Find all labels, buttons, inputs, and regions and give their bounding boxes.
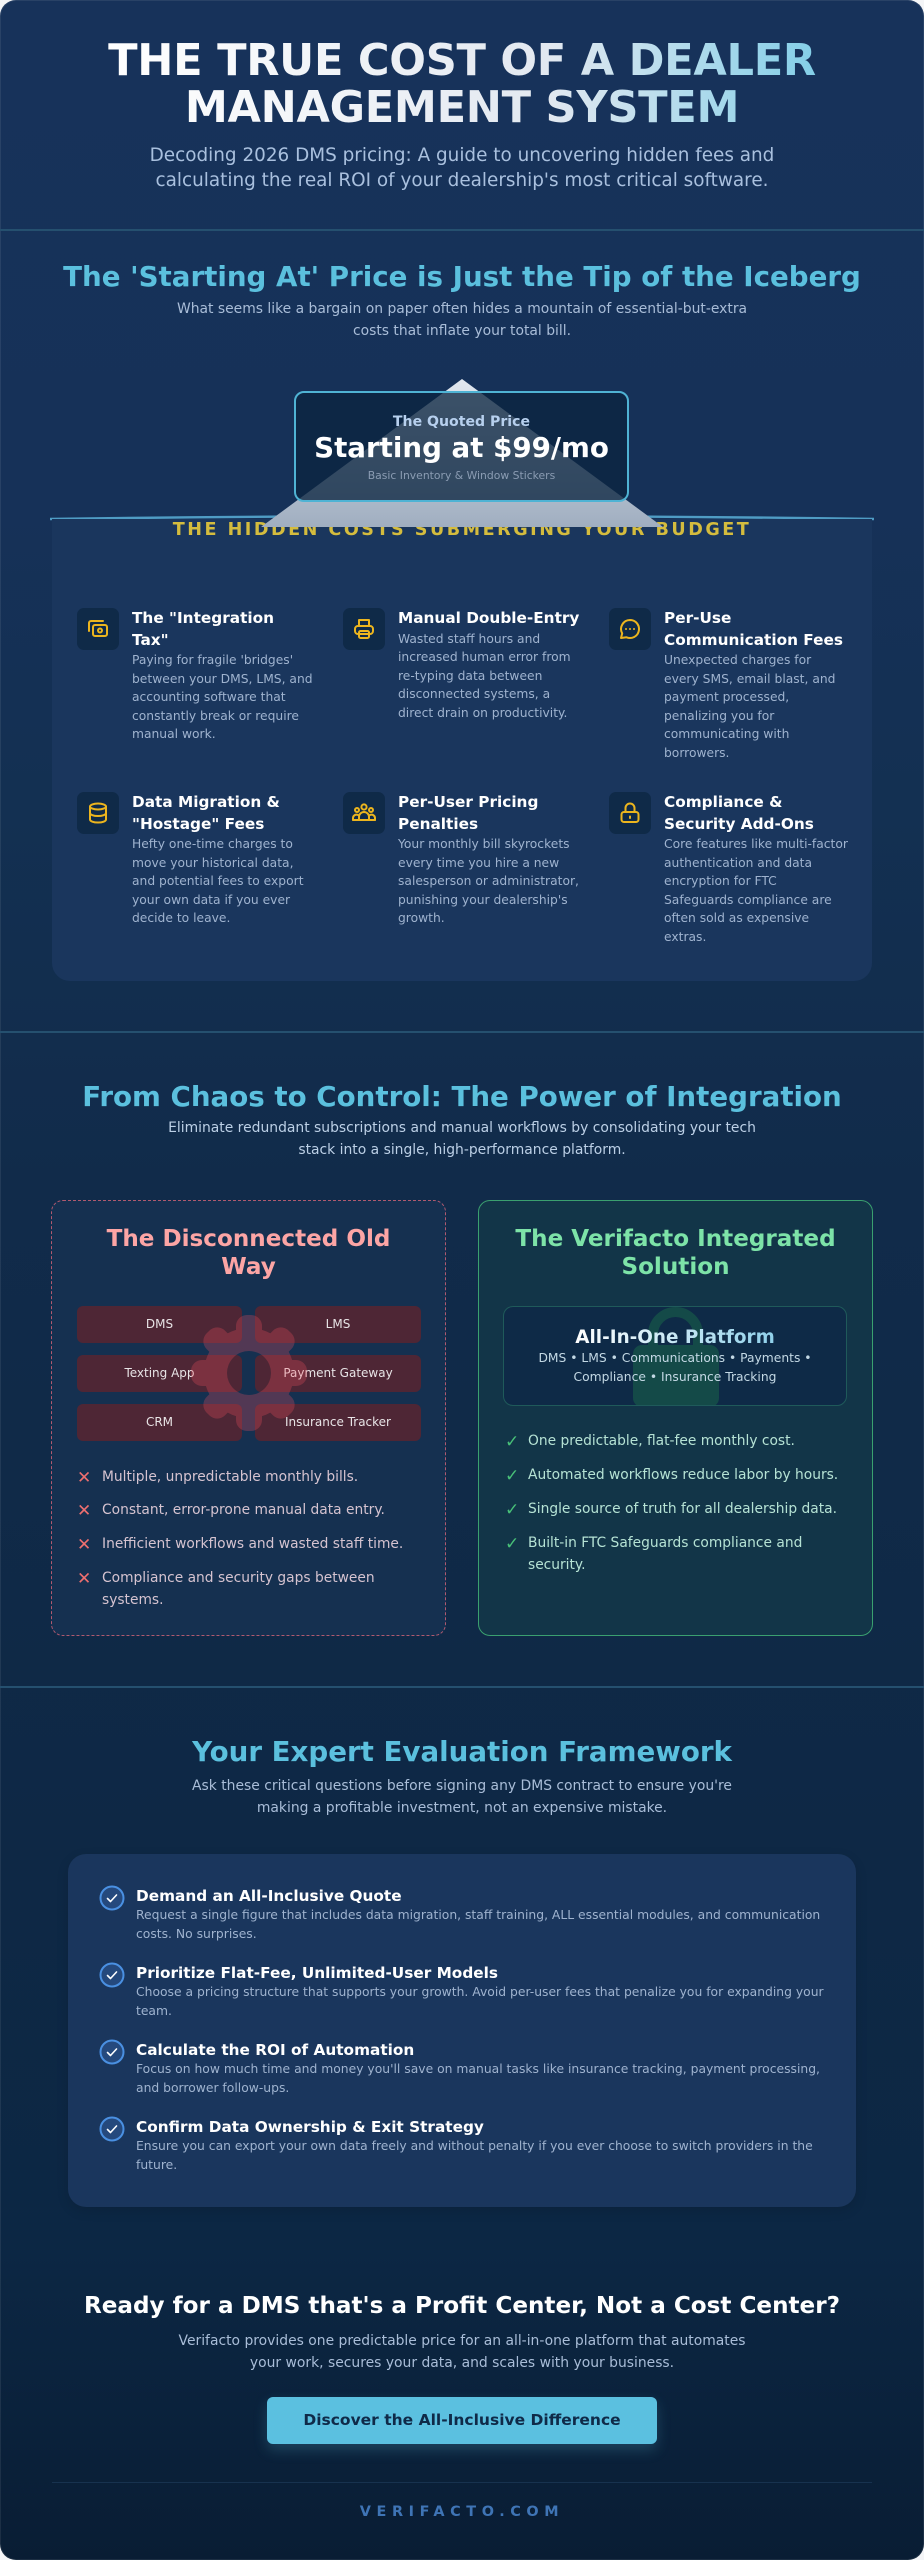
icon: database [77,792,119,834]
cost text: Penalties [398,815,478,833]
panel: hidden costs [52,519,872,981]
cost text: growth. [398,911,445,925]
cost item: integration tax [77,608,313,741]
old way list: ✕ [77,1569,91,1589]
iceberg section intro: What seems like a bargain on paper often hides a mountain of essential-but-extra [177,301,747,317]
solution heading [515,1226,836,1280]
item text: team. [136,2004,172,2018]
item text: Request a single figure that includes data migration, staff training, ALL essential modules, and communication [136,1908,820,1922]
platform modules: Compliance • Insurance Tracking [574,1370,776,1384]
cost text: Safeguards compliance are [664,893,832,907]
heading: iceberg section: The 'Starting At' Price is Just the Tip of the Iceberg [63,260,861,293]
old way list: ✕ [77,1535,91,1555]
heading: integration section: From Chaos to Control: The Power of Integration [82,1080,842,1113]
cost text: Per-Use [664,609,731,627]
cost text: Tax" [132,631,169,649]
cost text: Security Add-Ons [664,815,814,833]
subtitle: calculating the real ROI of your dealership's most critical software. [156,170,768,191]
call to action text [178,2333,745,2371]
old way list: Inefficient workflows and wasted staff time. [102,1536,403,1552]
cost text: encryption for FTC [664,874,777,888]
cost text: re-typing data between [398,669,542,683]
solution list: Single source of truth for all dealership data. [528,1501,837,1517]
solution list: ✓ [505,1432,519,1452]
icon: check circle [100,1886,124,1910]
item text [136,2041,820,2094]
cost text [132,609,313,741]
solution list: ✓ [505,1534,519,1554]
iceberg tip [261,379,663,527]
icon: check circle [100,2040,124,2064]
cost text: Your monthly bill skyrockets [398,837,570,851]
call to action text: Verifacto provides one predictable price for an all-in-one platform that automates [179,2333,745,2349]
old way heading: Way [221,1254,276,1280]
cost item: per-user pricing [343,792,579,925]
old way list: Compliance and security gaps between [102,1570,375,1586]
item text: Confirm Data Ownership & Exit Strategy [136,2118,484,2136]
checklist item 3 [100,2040,820,2094]
hidden costs heading: THE HIDDEN COSTS SUBMERGING YOUR BUDGET [173,520,751,540]
cost item: compliance add-ons [609,792,848,944]
call to action button [267,2397,657,2444]
old way heading: The Disconnected Old [107,1226,390,1252]
cost text: The "Integration [132,609,274,627]
solution list [505,1432,838,1573]
footer: website: VERIFACTO.COM [360,2504,564,2520]
solution list: ✓ [505,1500,519,1520]
old way list: ✕ [77,1501,91,1521]
cost text: disconnected systems, a [398,687,550,701]
icon: banknotes [77,608,119,650]
solution list: Built-in FTC Safeguards compliance and [528,1535,802,1551]
item text: Demand an All-Inclusive Quote [136,1887,402,1905]
framework intro: Ask these critical questions before signing any DMS contract to ensure you're [192,1778,732,1794]
platform modules [538,1351,812,1384]
cost text: borrowers. [664,746,729,760]
platform modules: DMS • LMS • Communications • Payments • [538,1351,812,1365]
old way list: Multiple, unpredictable monthly bills. [102,1469,358,1485]
cost text [132,793,304,925]
cost item: manual double-entry [343,608,579,720]
panel: integrated solution [478,1200,873,1636]
cost text: increased human error from [398,650,571,664]
title: THE TRUE COST OF A DEALER [108,36,816,86]
chips: disconnected tools: Insurance Tracker [285,1415,391,1429]
icon: lock [609,792,651,834]
item text [136,2118,813,2172]
chips: disconnected tools [77,1306,421,1441]
framework intro [192,1778,732,1816]
framework intro: making a profitable investment, not an expensive mistake. [257,1800,667,1816]
cost text [398,793,579,925]
icon: gear [191,1315,307,1431]
icon: check circle [100,2116,124,2142]
call to action button: Discover the All-Inclusive Difference [303,2411,621,2429]
cost text: Compliance & [664,793,782,811]
item text: and borrower follow-ups. [136,2080,289,2094]
cost text: Unexpected charges for [664,653,811,667]
panel: disconnected old way [51,1200,446,1636]
item text [136,1964,824,2018]
icon: lock watermark [633,1307,719,1405]
item text [136,1887,820,1940]
checklist item 2 [100,1962,824,2018]
item text: Focus on how much time and money you'll save on manual tasks like insurance tracking, payment processing, [136,2062,820,2076]
solution list: security. [528,1557,586,1573]
cost text: extras. [664,930,706,944]
solution list: ✓ [505,1466,519,1486]
cost text: between your DMS, LMS, and [132,672,313,686]
cost text: Hefty one-time charges to [132,837,293,851]
chips: disconnected tools: LMS [326,1317,350,1331]
item text: Choose a pricing structure that supports your growth. Avoid per-user fees that penalize you for expanding your [136,1985,824,1999]
cost text: Communication Fees [664,631,843,649]
item text: Ensure you can export your own data freely and without penalty if you ever choose to switch providers in the [136,2139,813,2153]
cost text: manual work. [132,727,216,741]
cost item: data migration [77,792,304,925]
solution list: One predictable, flat-fee monthly cost. [528,1433,795,1449]
title: MANAGEMENT SYSTEM [185,82,739,132]
chips: disconnected tools: Texting App [124,1366,195,1380]
item text: future. [136,2158,177,2172]
item text: costs. No surprises. [136,1926,257,1940]
old way list: ✕ [77,1468,91,1488]
title [90,38,834,131]
cost text: decide to leave. [132,911,230,925]
heading: evaluation framework: Your Expert Evaluation Framework [192,1735,732,1768]
chips: disconnected tools: DMS [146,1317,173,1331]
chips: disconnected tools: Payment Gateway [283,1366,393,1380]
icon: chat bubble [609,608,651,650]
all-in-one platform box [503,1306,847,1406]
checklist item 4 [100,2116,813,2172]
quoted price box [294,391,629,502]
cost text: accounting software that [132,690,286,704]
cost text: and potential fees to export [132,874,304,888]
cost text: every time you hire a new [398,856,559,870]
old way list: systems. [102,1592,163,1608]
solution list: Automated workflows reduce labor by hours. [528,1467,838,1483]
checklist item 1 [100,1886,820,1940]
cost text: Core features like multi-factor [664,837,848,851]
cost text [664,609,843,760]
icon: check circle [100,1962,124,1988]
subtitle: Decoding 2026 DMS pricing: A guide to uncovering hidden fees and [150,145,774,166]
platform name: All-In-One Platform [575,1327,775,1348]
iceberg section intro [177,301,747,339]
cost text: Wasted staff hours and [398,632,540,646]
cost text: penalizing you for [664,709,774,723]
cost text: Data Migration & [132,793,280,811]
cost text: move your historical data, [132,856,293,870]
cost text [664,793,848,944]
subtitle [150,145,774,191]
solution heading: The Verifacto Integrated [515,1226,836,1252]
old way list: Constant, error-prone manual data entry. [102,1502,385,1518]
icon: printer [343,608,385,650]
cost text: Paying for fragile 'bridges' [132,653,293,667]
cost text: authentication and data [664,856,812,870]
integration section intro: stack into a single, high-performance platform. [298,1142,626,1158]
cost text: Per-User Pricing [398,793,538,811]
iceberg section intro: costs that inflate your total bill. [353,323,571,339]
solution heading: Solution [621,1254,730,1280]
quoted price label: The Quoted Price [393,414,530,430]
cost text: direct drain on productivity. [398,706,567,720]
old way list [77,1468,403,1608]
cost text [398,609,579,720]
cost text: every SMS, email blast, and [664,672,835,686]
integration section intro [168,1120,756,1158]
cost text: constantly break or require [132,709,299,723]
cost text: salesperson or administrator, [398,874,579,888]
panel: checklist [68,1854,856,2207]
old way heading [106,1226,390,1280]
item text: Prioritize Flat-Fee, Unlimited-User Models [136,1964,498,1982]
item text: Calculate the ROI of Automation [136,2041,414,2059]
cost text: punishing your dealership's [398,893,568,907]
water line [50,515,874,520]
quoted price value: Starting at $99/mo [314,431,609,464]
cost text: Manual Double-Entry [398,609,579,627]
cost item: per-use communication [609,608,843,760]
quoted price note: Basic Inventory & Window Stickers [368,469,555,482]
icon: users [343,792,385,834]
call to action heading: Ready for a DMS that's a Profit Center, Not a Cost Center? [84,2293,840,2319]
cost text: often sold as expensive [664,911,809,925]
cost text: payment processed, [664,690,789,704]
cost text: your own data if you ever [132,893,290,907]
integration section intro: Eliminate redundant subscriptions and manual workflows by consolidating your tech [168,1120,756,1136]
cost text: communicating with [664,727,789,741]
call to action text: your work, secures your data, and scales with your business. [250,2355,674,2371]
cost text: "Hostage" Fees [132,815,264,833]
chips: disconnected tools: CRM [146,1415,173,1429]
